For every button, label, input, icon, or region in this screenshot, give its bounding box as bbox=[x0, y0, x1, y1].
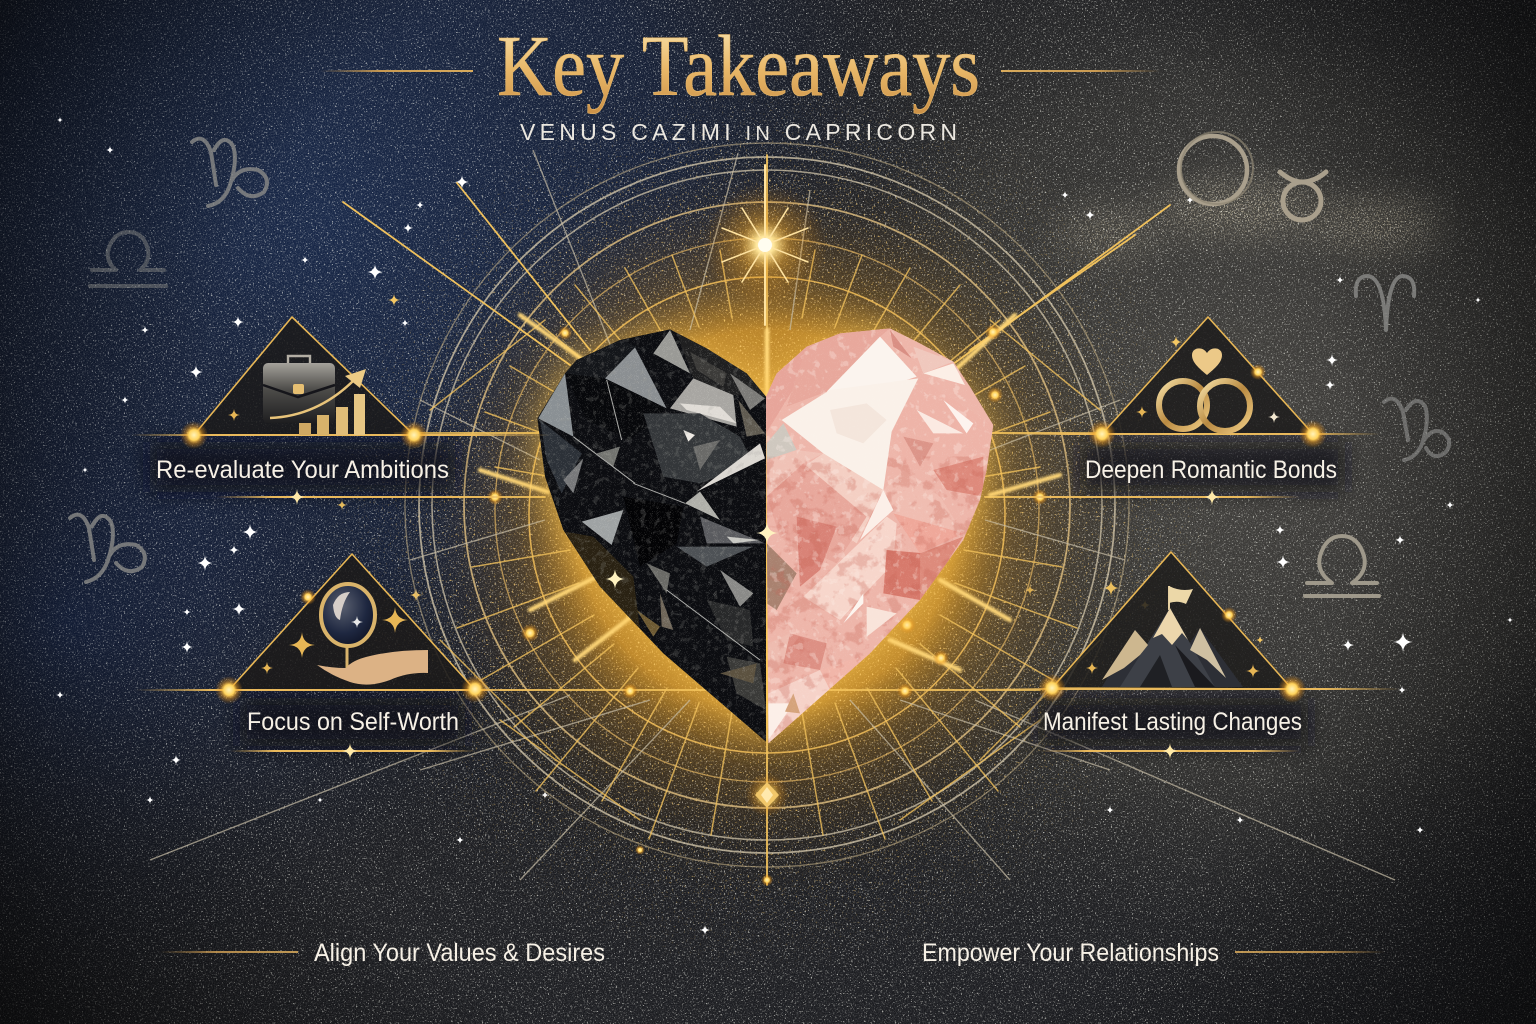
triangle frame bbox=[1052, 552, 1292, 689]
base line bbox=[1000, 433, 1380, 435]
capricorn glyph mid left bbox=[70, 515, 145, 582]
icon: hand holding a mirror bbox=[261, 584, 428, 685]
triangle frame bbox=[1102, 317, 1313, 434]
left half mineral texture bbox=[533, 323, 766, 747]
text band shadow bbox=[240, 698, 465, 746]
title rules bbox=[320, 70, 1160, 72]
takeaway: focus on self-worth bbox=[135, 554, 560, 759]
heart gem glow bbox=[545, 335, 985, 730]
label: Re-evaluate Your Ambitions bbox=[156, 456, 449, 484]
right half mineral texture bbox=[766, 323, 999, 747]
milky way band bbox=[1042, 157, 1459, 277]
glowing nodes bbox=[180, 421, 428, 449]
divider with spark bbox=[1000, 489, 1300, 505]
rule bbox=[160, 951, 298, 953]
gold dust around wheel bbox=[316, 70, 1216, 971]
glowing nodes bbox=[1038, 607, 1306, 703]
astrological wheel bbox=[150, 143, 1395, 880]
aries glyph bbox=[1356, 276, 1414, 330]
libra glyph right bbox=[1305, 536, 1379, 596]
label: Empower Your Relationships bbox=[922, 939, 1219, 967]
wheel nodes bbox=[487, 324, 1048, 886]
heart facet speckle bbox=[533, 323, 999, 747]
text band shadow bbox=[150, 442, 455, 492]
base line bbox=[135, 689, 560, 691]
title bbox=[320, 17, 1160, 145]
divider with spark bbox=[1040, 743, 1300, 759]
takeaway: deepen romantic bonds bbox=[1000, 317, 1380, 505]
zodiac glyphs bbox=[70, 132, 1449, 596]
text band shadow bbox=[1038, 698, 1308, 746]
main heading: Key Takeaways bbox=[497, 17, 980, 114]
triangle frame bbox=[229, 554, 475, 690]
capricorn glyph top left bbox=[192, 139, 267, 206]
right rose quartz faceted half bbox=[766, 323, 999, 747]
left black faceted half bbox=[533, 323, 767, 747]
icon: briefcase with rising chart bbox=[228, 356, 366, 435]
takeaway: re-evaluate your ambitions bbox=[130, 317, 550, 505]
subtitle: VENUS CAZIMI IN CAPRICORN bbox=[520, 119, 957, 145]
right half bright facets bbox=[768, 330, 973, 740]
rule bbox=[1235, 951, 1385, 953]
label: Focus on Self-Worth bbox=[247, 708, 459, 736]
taurus glyph bbox=[1280, 172, 1326, 220]
label: Deepen Romantic Bonds bbox=[1085, 456, 1337, 484]
label: Manifest Lasting Changes bbox=[1043, 708, 1302, 736]
label: Align Your Values & Desires bbox=[314, 939, 605, 967]
golden rays bbox=[343, 155, 1170, 885]
base line bbox=[130, 434, 550, 436]
sun ring glyph bbox=[1179, 132, 1253, 204]
icon: heart and linked rings bbox=[1136, 348, 1280, 431]
glowing nodes bbox=[215, 589, 489, 704]
heart gem bbox=[533, 323, 999, 747]
sparkles on heart bbox=[605, 522, 778, 589]
glowing nodes bbox=[1088, 364, 1327, 448]
takeaway: manifest lasting changes bbox=[985, 552, 1400, 759]
divider with spark bbox=[215, 489, 535, 505]
icon: mountain peak with flag bbox=[1086, 586, 1260, 687]
triangle frame bbox=[194, 317, 414, 435]
diamond ornament below the heart bbox=[745, 773, 789, 817]
text band shadow bbox=[1080, 442, 1345, 492]
divider with spark bbox=[230, 743, 475, 759]
capricorn glyph right bbox=[1384, 399, 1449, 460]
bright star above the heart bbox=[703, 165, 827, 325]
libra glyph left bbox=[90, 232, 166, 286]
central golden glow bbox=[360, 120, 1180, 920]
base line bbox=[985, 688, 1400, 690]
